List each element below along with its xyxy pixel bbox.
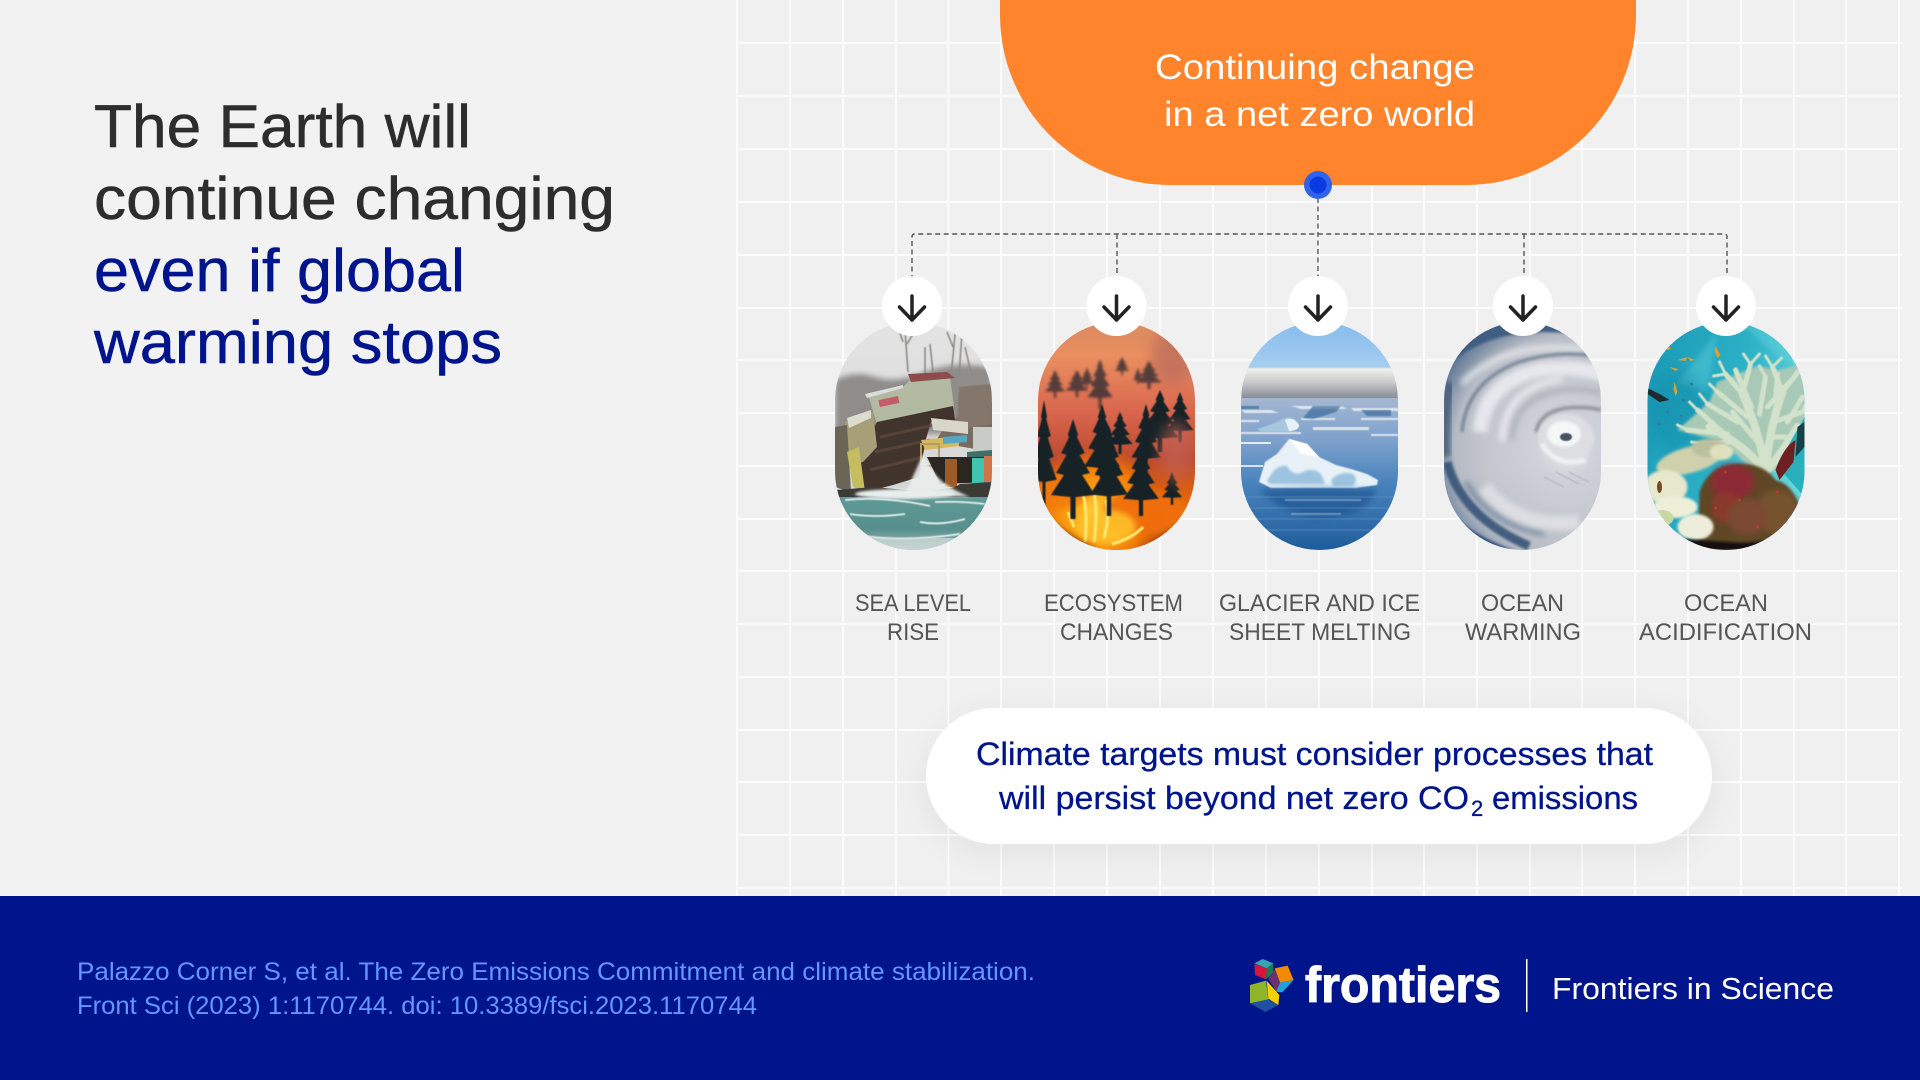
arrow badge: sea level rise (882, 276, 942, 336)
dashed connector lines (912, 198, 1727, 280)
icon: frontiers logo cubes (1250, 959, 1294, 1012)
label: ocean warming (1465, 590, 1581, 646)
callout text: will persist beyond net zero CO (998, 780, 1469, 816)
citation: Front Sci (2023) 1:1170744. doi: 10.3389/fsci.2023.1170744 (77, 992, 757, 1020)
heading text: Continuing change (1155, 48, 1475, 87)
journal name: Frontiers in Science (1552, 971, 1834, 1006)
label: ecosystem changes (1044, 590, 1183, 646)
photo: sea level rise (835, 322, 992, 550)
logo divider (1526, 959, 1528, 1012)
citation: Palazzo Corner S, et al. The Zero Emissions Commitment and climate stabilization. (77, 958, 1035, 986)
label: ocean warming: OCEAN (1481, 590, 1564, 617)
citation (77, 958, 1035, 1020)
label: sea level rise (855, 590, 971, 646)
callout text: 2 (1471, 796, 1483, 821)
label: ocean acidification: ACIDIFICATION (1639, 619, 1812, 646)
arrow badge: ecosystem changes (1086, 276, 1146, 336)
label: sea level rise: SEA LEVEL (855, 590, 971, 617)
label: ocean warming: WARMING (1465, 619, 1581, 646)
arrow badge: ocean warming (1493, 276, 1553, 336)
arrow badge: glacier melting (1288, 276, 1348, 336)
callout (926, 708, 1712, 844)
heading text (1155, 48, 1475, 134)
photo: ocean acidification (1644, 322, 1804, 550)
label: glacier and ice sheet melting: GLACIER AND ICE (1219, 590, 1420, 617)
background grid (737, 0, 1902, 896)
title: warming stops (93, 309, 502, 376)
frontiers wordmark: frontiers (1305, 957, 1501, 1013)
heading text: in a net zero world (1164, 95, 1475, 134)
label: glacier and ice sheet melting (1219, 590, 1420, 646)
photo: ecosystem changes (1031, 322, 1195, 550)
photo: ocean warming (1444, 322, 1601, 550)
label: glacier and ice sheet melting: SHEET MELTING (1229, 619, 1411, 646)
panel: orange heading shape (1000, 0, 1636, 185)
callout text (976, 736, 1653, 821)
title: continue changing (94, 165, 615, 232)
connector dot (1304, 171, 1332, 199)
photo: glacier and ice sheet melting (1241, 322, 1398, 550)
callout text: emissions (1492, 780, 1638, 816)
footer band (0, 896, 1920, 1080)
callout text: Climate targets must consider processes that (976, 736, 1653, 772)
label: sea level rise: RISE (887, 619, 939, 646)
title: even if global (94, 237, 465, 304)
title: The Earth will (94, 93, 471, 160)
label: ecosystem changes: ECOSYSTEM (1044, 590, 1183, 617)
label: ocean acidification (1639, 590, 1812, 646)
label: ocean acidification: OCEAN (1684, 590, 1768, 617)
arrow badge: ocean acidification (1696, 276, 1756, 336)
title (93, 93, 615, 376)
label: ecosystem changes: CHANGES (1060, 619, 1173, 646)
